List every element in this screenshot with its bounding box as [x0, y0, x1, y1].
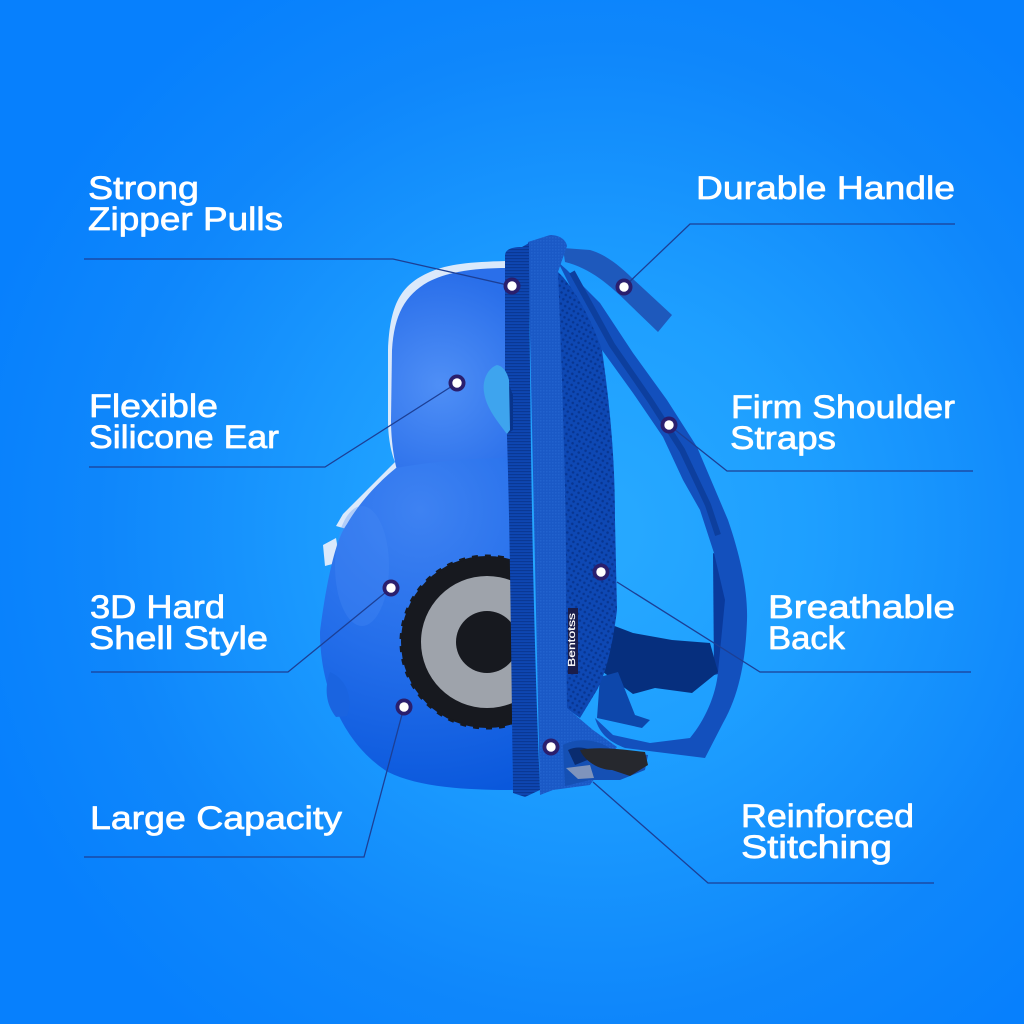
mesh back panel: [555, 272, 617, 718]
callout: Breathable Back: Back: [768, 620, 846, 656]
callout: Large Capacity: Large Capacity: [90, 800, 342, 836]
callout: Reinforced Stitching: [542, 738, 934, 883]
callout: Large Capacity: [84, 698, 412, 857]
callout: Flexible Silicone Ear: Silicone Ear: [89, 419, 279, 455]
shoulder strap: [558, 262, 747, 758]
brand label: [567, 608, 578, 674]
callout: Strong Zipper Pulls: Zipper Pulls: [88, 201, 283, 237]
callout: Firm Shoulder Straps: Firm Shoulder: [731, 389, 955, 425]
callout: 3D Hard Shell Style: [89, 580, 400, 672]
callout: Durable Handle: [616, 170, 955, 296]
zipper track: [505, 243, 540, 797]
callout: Firm Shoulder Straps: Straps: [730, 420, 836, 456]
callout: Reinforced Stitching: Reinforced: [741, 798, 914, 834]
shoulder pad: [597, 553, 727, 728]
callout: Flexible Silicone Ear: [89, 374, 466, 467]
hard shell lower body: [320, 458, 513, 790]
strap shading: [572, 272, 718, 535]
backpack illustration: [320, 235, 747, 797]
callout: Flexible Silicone Ear: Flexible: [89, 388, 218, 424]
hard shell white rim: [336, 261, 510, 530]
white trim patch: [323, 538, 340, 566]
carry handle: [563, 248, 672, 332]
callout: 3D Hard Shell Style: Shell Style: [89, 620, 268, 656]
callout: Durable Handle: Durable Handle: [696, 170, 955, 206]
callout: Strong Zipper Pulls: [84, 170, 520, 294]
hard shell upper body: [391, 268, 510, 470]
callout: Firm Shoulder Straps: [660, 389, 973, 471]
wheel eye: [400, 554, 512, 730]
callout: Breathable Back: Breathable: [768, 589, 955, 625]
callout: Reinforced Stitching: Stitching: [741, 829, 892, 865]
silicone ear: [484, 365, 513, 434]
lower strap buckle: [563, 740, 648, 786]
callout: Strong Zipper Pulls: Strong: [88, 170, 199, 206]
fabric side band: [528, 235, 617, 795]
shell molded bumps: [327, 506, 389, 717]
brand label: Bentotss: [567, 613, 578, 667]
callout: Breathable Back: [592, 564, 971, 672]
callout: 3D Hard Shell Style: 3D Hard: [90, 589, 225, 625]
